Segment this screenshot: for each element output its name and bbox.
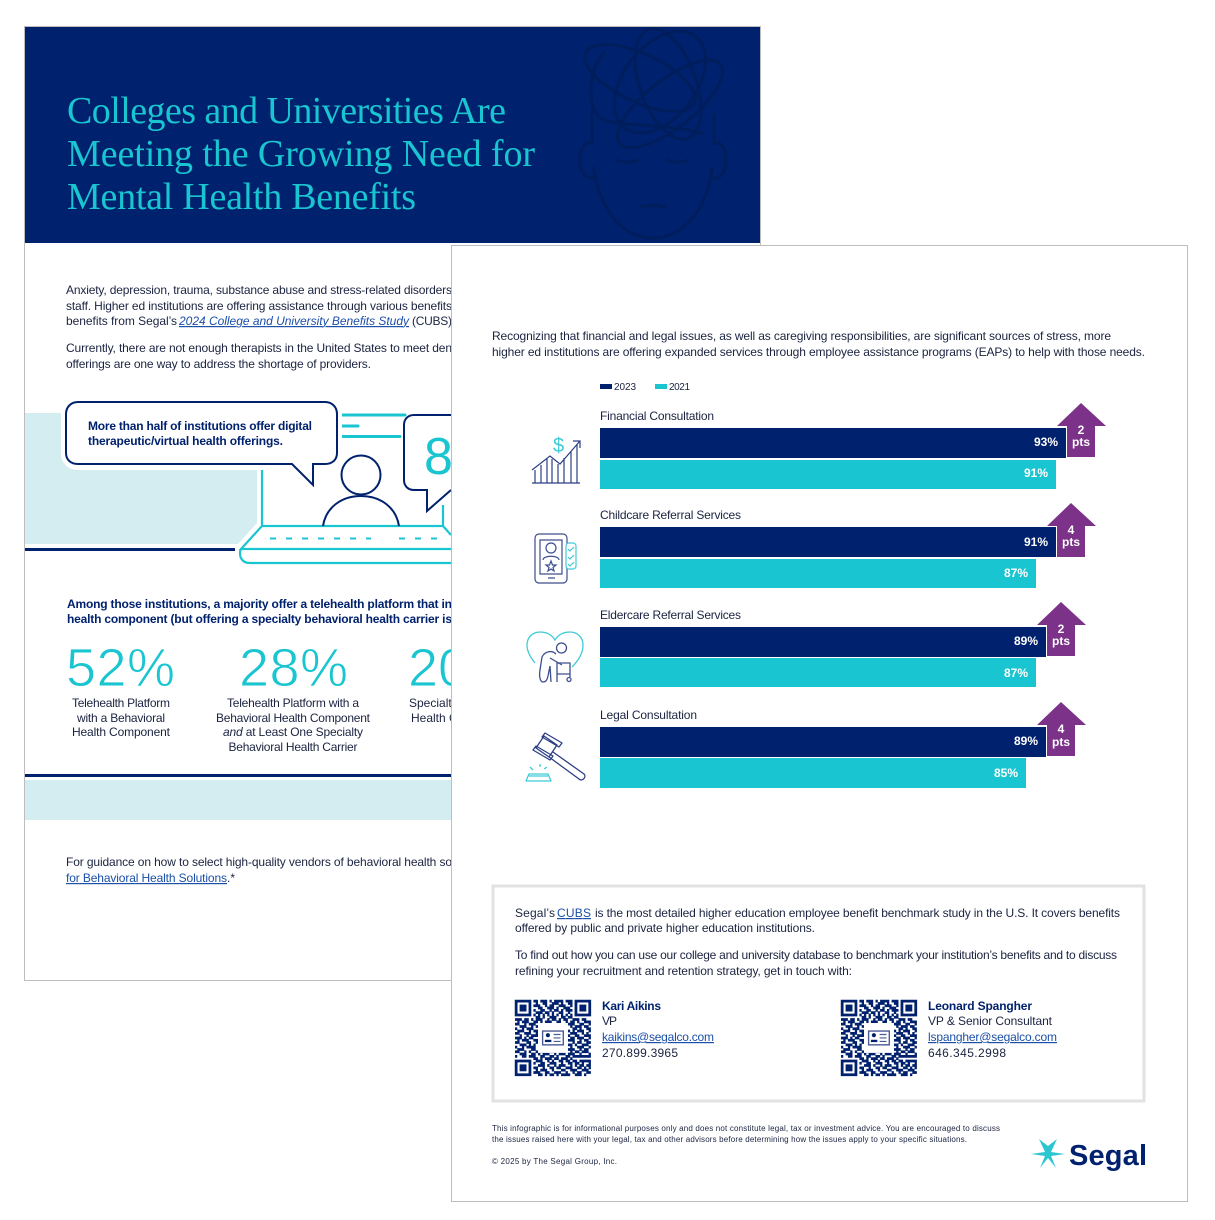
- logo: Segal: [1031, 1139, 1147, 1172]
- contact: Leonard Spangher: [841, 999, 1057, 1075]
- callout: digital offerings: [61, 396, 342, 485]
- title: [67, 90, 535, 218]
- panel: contact box: [493, 886, 1144, 1101]
- disclaimer: This infographic is for informational purposes only and does not constitute legal, tax or investment advice. You are encouraged to discuss: [492, 1124, 1000, 1133]
- callout: digital offerings: therapeutic/virtual health offerings.: [88, 434, 283, 448]
- icon: growth chart: [532, 435, 580, 483]
- logo: Segal: Segal: [1069, 1140, 1147, 1172]
- telehealth heading: health component (but offering a specialty behavioral health carrier is: [67, 612, 452, 626]
- stat: 52%: 52%: [66, 638, 175, 698]
- intro text: Recognizing that financial and legal issues, as well as caregiving responsibilities, are significant sources of stress, more: [492, 329, 1111, 343]
- guidance text: .*: [227, 871, 235, 885]
- about CUBS text: Segal’s: [515, 906, 555, 920]
- intro text: staff. Higher ed institutions are offering assistance through various benefits: [66, 299, 452, 313]
- chart row: legal consultation: [526, 702, 1086, 788]
- contact: Leonard Spangher: VP & Senior Consultant: [928, 1014, 1053, 1028]
- title: Colleges and Universities Are: [67, 90, 506, 132]
- stat: 28%: 28%: [239, 638, 348, 698]
- chart row: eldercare referral: 89%: [1014, 634, 1038, 648]
- contact: Kari Aikins: 270.899.3965: [602, 1046, 678, 1060]
- contact: Leonard Spangher: 646.345.2998: [928, 1046, 1006, 1060]
- stat: 28%: [216, 638, 371, 754]
- intro text: [66, 283, 452, 371]
- title: Meeting the Growing Need for: [67, 133, 535, 175]
- arrow: 2 pts: [1057, 403, 1106, 457]
- arrow: 4 pts: [1037, 702, 1086, 756]
- chart row: financial consultation: [532, 403, 1106, 489]
- light blue band: [25, 780, 452, 820]
- intro text: higher ed institutions are offering expanded services through employee assistance programs (EAPs) to help with those needs.: [492, 345, 1145, 359]
- about CUBS text: CUBS: [557, 906, 591, 920]
- arrow: 2 pts: [1037, 602, 1086, 656]
- about CUBS text: refining your recruitment and retention strategy, get in touch with:: [515, 964, 852, 978]
- stat: 20% partially hidden: Health C: [411, 711, 458, 725]
- arrow: 4 pts: 4: [1068, 523, 1075, 537]
- chart row: eldercare referral: [527, 602, 1086, 687]
- panel: right page: [452, 246, 1188, 1202]
- arrow: 4 pts: pts: [1062, 535, 1080, 549]
- arrow: 2 pts: pts: [1052, 634, 1070, 648]
- intro text: benefits from Segal’s: [66, 314, 177, 328]
- intro text: 2024 College and University Benefits Study: [178, 314, 410, 328]
- chart row: eldercare referral: Eldercare Referral Services: [600, 608, 741, 622]
- stat: 52%: with a Behavioral: [76, 711, 165, 725]
- guidance text: for Behavioral Health Solutions: [66, 871, 227, 885]
- guidance text: [66, 855, 452, 885]
- telehealth heading: Among those institutions, a majority offer a telehealth platform that in: [67, 597, 452, 611]
- legend: [600, 382, 690, 393]
- about CUBS text: To find out how you can use our college and university database to benchmark your institution’s benefits and to discuss: [515, 948, 1117, 962]
- contact: Kari Aikins: [515, 999, 714, 1075]
- navy rule lower: [25, 774, 452, 777]
- about CUBS text: offered by public and private higher education institutions.: [515, 921, 815, 935]
- icon: growth chart: $: [553, 435, 564, 457]
- disclaimer: © 2025 by The Segal Group, Inc.: [492, 1157, 617, 1166]
- intro text: [492, 329, 1145, 359]
- telehealth heading: [67, 597, 452, 626]
- intro text: Anxiety, depression, trauma, substance abuse and stress-related disorders: [66, 283, 452, 297]
- contact: Kari Aikins: Kari Aikins: [602, 999, 661, 1013]
- icon: gavel: [526, 733, 585, 781]
- header banner: [25, 14, 760, 243]
- stat: 28%: Telehealth Platform with a: [227, 696, 359, 710]
- contact: Kari Aikins: VP: [602, 1014, 617, 1028]
- stat: 28%: and at Least One Specialty: [223, 725, 363, 739]
- chart row: financial consultation: 93%: [1034, 435, 1058, 449]
- chart row: financial consultation: Financial Consultation: [600, 409, 714, 423]
- chart row: childcare referral: Childcare Referral Services: [600, 508, 741, 522]
- stat: 28%: Behavioral Health Carrier: [228, 740, 358, 754]
- navy rule: [25, 548, 235, 551]
- about CUBS text: [515, 906, 1120, 978]
- guidance text: For guidance on how to select high-quality vendors of behavioral health so: [66, 855, 452, 869]
- panel: left page: [24, 14, 760, 980]
- chart row: childcare referral: 87%: [1004, 566, 1028, 580]
- title: Mental Health Benefits: [67, 176, 416, 218]
- legend: 2021: [669, 382, 690, 393]
- stat: 28%: Behavioral Health Component: [216, 711, 371, 725]
- disclaimer: the issues raised here with your legal, tax and other advisors before determining how the issues apply to your specific situations.: [492, 1135, 967, 1144]
- icon: elder with walker in heart: [527, 632, 583, 682]
- arrow: 4 pts: pts: [1052, 735, 1070, 749]
- chart row: financial consultation: 91%: [1024, 466, 1048, 480]
- stat: 52%: Health Component: [72, 725, 171, 739]
- contact: Leonard Spangher: Leonard Spangher: [928, 999, 1032, 1013]
- intro text: (CUBS): [412, 314, 452, 328]
- icon: head with tangled thoughts: [575, 14, 735, 238]
- chart row: eldercare referral: 87%: [1004, 666, 1028, 680]
- chart row: legal consultation: Legal Consultation: [600, 708, 697, 722]
- chart row: legal consultation: 85%: [994, 766, 1018, 780]
- chart row: childcare referral: [535, 503, 1096, 588]
- intro text: offerings are one way to address the shortage of providers.: [66, 357, 371, 371]
- illustration: person at laptop: 8: [424, 428, 453, 486]
- stat: 52%: [66, 638, 175, 739]
- arrow: 4 pts: [1047, 503, 1096, 557]
- legend: 2023: [614, 382, 636, 393]
- QR code: [841, 1001, 917, 1075]
- light blue background block: [25, 413, 257, 544]
- stat: 20% partially hidden: 20: [408, 638, 468, 698]
- stat: 20% partially hidden: Specialt: [409, 696, 452, 710]
- illustration: person at laptop: [240, 415, 453, 563]
- arrow: 2 pts: pts: [1072, 435, 1090, 449]
- arrow: 2 pts: 2: [1058, 622, 1065, 636]
- contact: Kari Aikins: kaikins@segalco.com: [602, 1030, 714, 1044]
- stat: 20% partially hidden: [408, 638, 468, 725]
- about CUBS text: is the most detailed higher education employee benefit benchmark study in the U.S. It covers benefits: [595, 906, 1120, 920]
- contact: Leonard Spangher: lspangher@segalco.com: [928, 1030, 1057, 1044]
- arrow: 2 pts: 2: [1078, 423, 1085, 437]
- intro text: Currently, there are not enough therapists in the United States to meet den: [66, 341, 452, 355]
- disclaimer: [492, 1124, 1000, 1166]
- callout: digital offerings: More than half of institutions offer digital: [88, 419, 312, 433]
- chart row: legal consultation: 89%: [1014, 734, 1038, 748]
- icon: phone with profile: [535, 534, 576, 583]
- chart row: childcare referral: 91%: [1024, 535, 1048, 549]
- QR code: [515, 1001, 591, 1075]
- arrow: 4 pts: 4: [1058, 722, 1065, 736]
- stat: 52%: Telehealth Platform: [72, 696, 170, 710]
